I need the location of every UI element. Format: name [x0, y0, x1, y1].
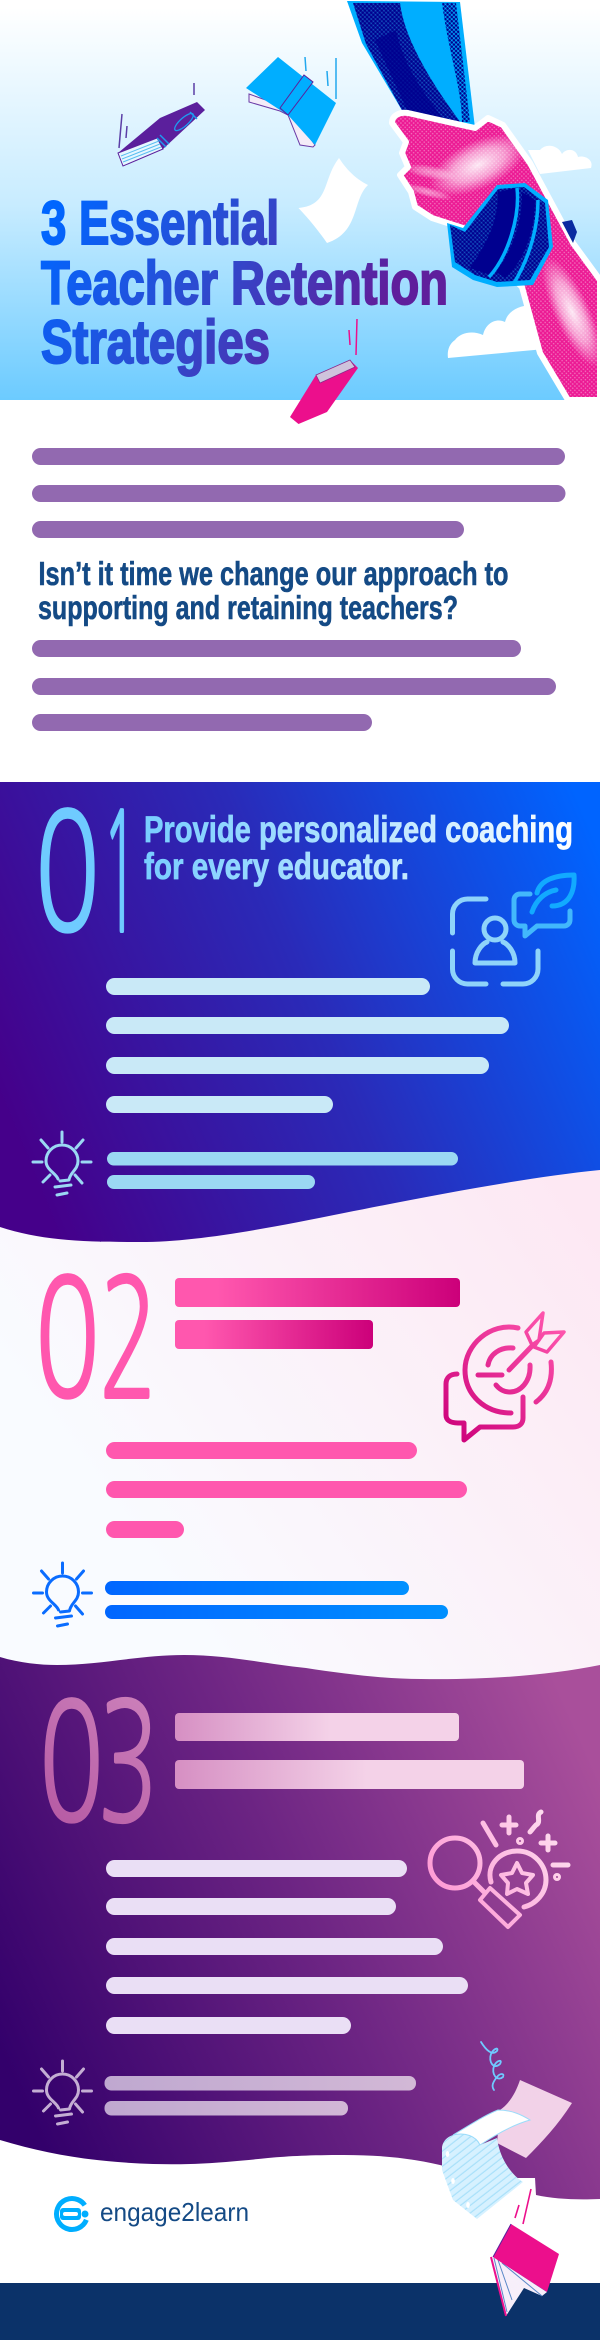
pink open book — [491, 2224, 559, 2316]
strategy 01 heading: for every educator. — [144, 846, 409, 887]
strategy 02 text bars — [106, 1442, 467, 1538]
blue open falling book — [246, 57, 336, 147]
number 03: 0 — [38, 1680, 104, 1846]
intro question heading — [38, 555, 508, 626]
white flying sheet — [298, 158, 368, 243]
title — [41, 189, 448, 376]
icon: light bulb — [34, 2061, 92, 2124]
intro lower text bars — [32, 640, 556, 731]
panel: strategy 01: 1 — [102, 790, 138, 956]
panel: strategy 03 — [0, 1655, 600, 2199]
section 01 background — [0, 782, 600, 1242]
footer band — [0, 2283, 600, 2340]
title: Teacher Retention — [41, 249, 448, 317]
panel: introduction — [32, 448, 566, 731]
sky background — [0, 0, 600, 400]
binder holes — [446, 2151, 470, 2208]
logo: engage2learn — [52, 2194, 249, 2234]
lined blue sheet — [442, 2134, 523, 2219]
number 01: 0 — [34, 790, 100, 956]
blue sleeve — [347, 1, 475, 128]
strategy 03 tip bars — [104, 2076, 416, 2116]
icon: coaching person and leaf chat — [452, 875, 574, 984]
strategy 03 title bars — [175, 1713, 524, 1789]
icon: target and chat — [446, 1313, 564, 1440]
hero panel — [0, 0, 600, 424]
strategy 01 tip bars — [107, 1152, 458, 1189]
number 03: 3 — [97, 1680, 159, 1846]
purple falling book — [118, 83, 205, 166]
section 03 background — [0, 1655, 600, 2199]
strategy 01 text bars — [106, 978, 509, 1113]
panel: strategy 02 — [34, 1256, 564, 1626]
blue gripping fingers — [447, 183, 577, 287]
illustration: helping hands — [347, 1, 600, 405]
strategy 01 heading — [144, 809, 573, 887]
panel: strategy 02 background — [0, 1140, 600, 1700]
curled sheet edge — [453, 2110, 530, 2145]
white notch behind paper — [500, 2178, 536, 2195]
pink falling book — [290, 319, 358, 424]
strategy 03 text bars — [106, 1860, 468, 2034]
intro question heading: supporting and retaining teachers? — [38, 589, 458, 626]
title: 3 Essential — [41, 189, 279, 257]
strategy 02 title bars — [175, 1278, 460, 1349]
motion lines — [515, 2189, 531, 2224]
intro text bars — [32, 448, 566, 538]
illustration: falling papers and book — [442, 2042, 572, 2316]
logo: engage2learn: engage2learn — [100, 2197, 249, 2227]
number 02: 0 — [34, 1256, 100, 1422]
icon: light bulb — [33, 1132, 91, 1195]
panel: strategy 01 — [0, 782, 600, 1242]
title: Strategies — [41, 308, 270, 376]
cloud lower left — [448, 305, 545, 358]
cloud upper right — [528, 146, 592, 174]
pink hand and forearm — [385, 105, 600, 405]
icon: magnifier and star — [430, 1812, 568, 1927]
blue squiggle — [481, 2042, 503, 2090]
number 02: 2 — [98, 1256, 158, 1422]
icon: light bulb — [34, 1563, 92, 1626]
strategy 02 tip bars — [105, 1581, 448, 1619]
pink sheet — [497, 2080, 572, 2158]
